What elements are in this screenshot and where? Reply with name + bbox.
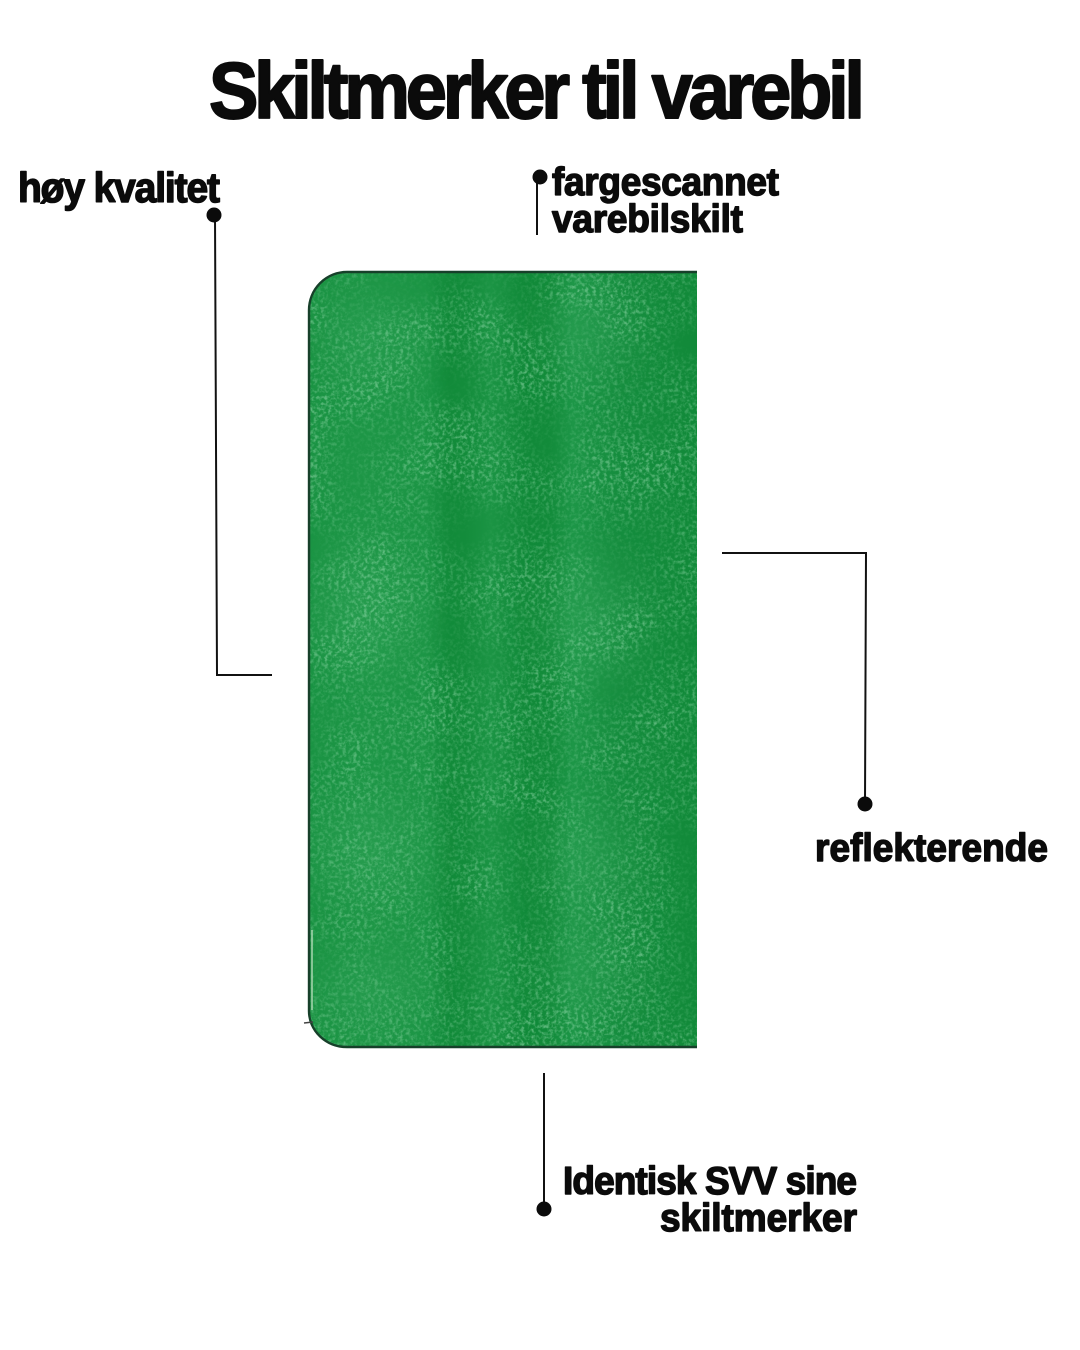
dot: høy kvalitet [206, 208, 222, 222]
callout: identisk SVV [536, 1073, 857, 1240]
callout: fargescannet varebilskilt [532, 160, 779, 241]
dot: identisk SVV [536, 1202, 552, 1216]
label: Identisk SVV sine skiltmerker [563, 1159, 857, 1240]
connector line: identisk SVV [543, 1073, 545, 1209]
dot: fargescannet [532, 170, 548, 184]
label: fargescannet varebilskilt [552, 160, 779, 241]
connector line: reflekterende [722, 553, 866, 804]
label: fargescannet varebilskilt: fargescannet [552, 160, 779, 204]
label: Identisk SVV sine skiltmerker: skiltmerker [660, 1196, 857, 1240]
callout: reflekterende [722, 553, 1048, 870]
connector line: fargescannet [536, 177, 538, 235]
label: Identisk SVV sine skiltmerker: Identisk SVV sine [563, 1159, 857, 1203]
label: fargescannet varebilskilt: varebilskilt [552, 197, 743, 241]
panel: green plate [304, 268, 701, 1050]
title: Skiltmerker til varebil [209, 46, 865, 136]
connector line: høy kvalitet [215, 215, 272, 675]
label: høy kvalitet: høy kvalitet [18, 164, 220, 211]
callout: høy kvalitet [18, 164, 272, 675]
dot: reflekterende [858, 796, 872, 812]
label: reflekterende: reflekterende [815, 826, 1048, 870]
